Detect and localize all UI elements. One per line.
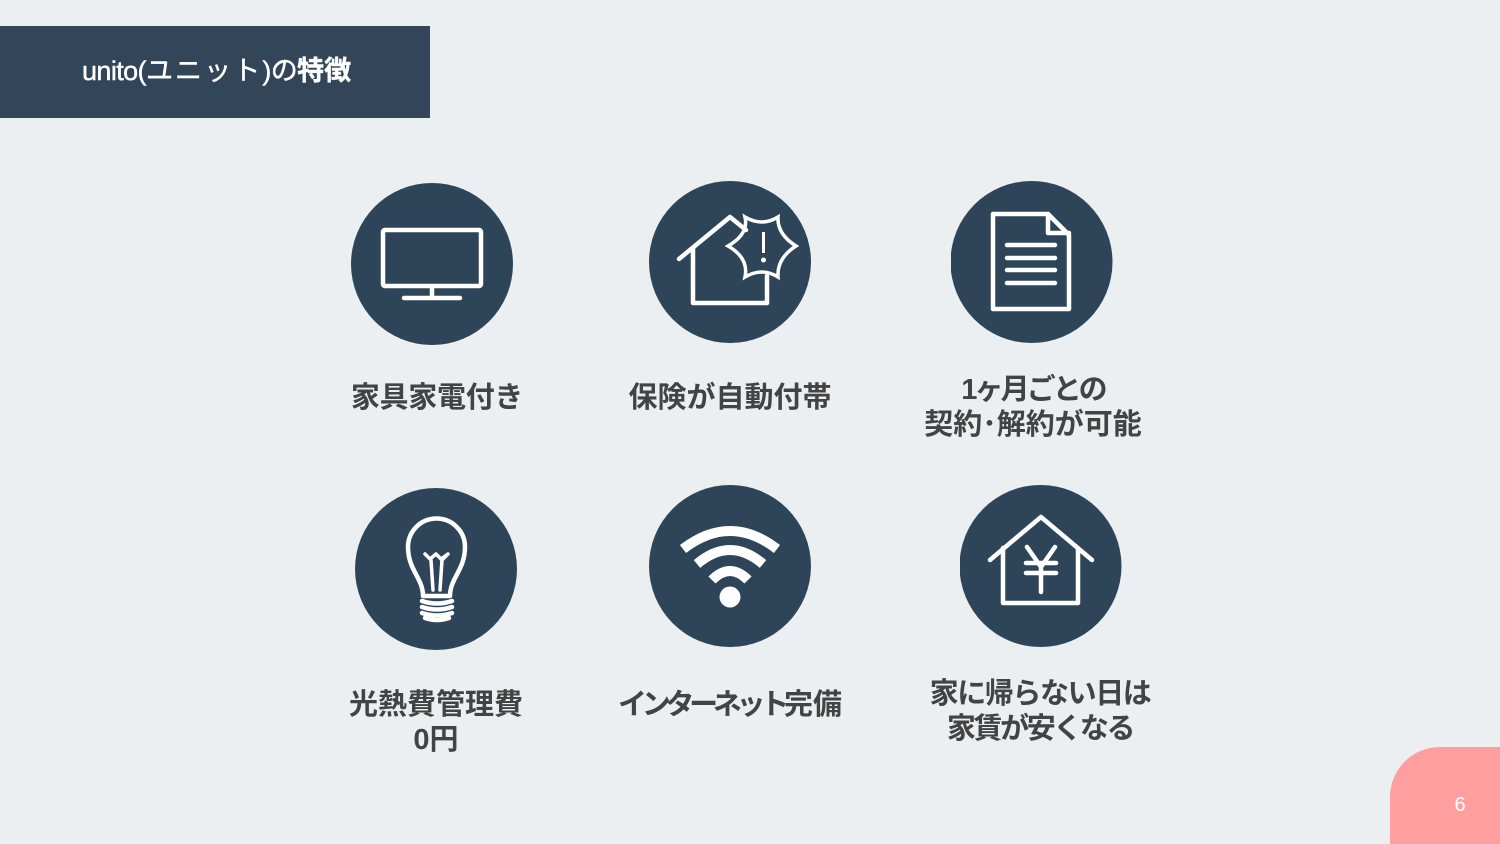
title banner — [0, 26, 430, 118]
page number: 6 — [1454, 794, 1466, 816]
label: rent reduction — [930, 678, 1151, 745]
label: utilities and management fee — [349, 688, 523, 756]
page number tab — [1390, 747, 1500, 844]
icon: television — [351, 183, 513, 345]
feature: internet — [618, 485, 842, 721]
title text: unito(ユニット)の特徴 — [82, 56, 351, 86]
feature: insurance — [628, 181, 832, 414]
feature: monthly contract — [924, 181, 1142, 441]
label: monthly contract: 1ヶ月ごとの — [961, 374, 1105, 406]
icon: house with yen — [960, 485, 1122, 647]
feature: utilities and management fee — [349, 488, 523, 756]
label: monthly contract: 契約･解約が可能 — [924, 409, 1142, 441]
feature: furniture and appliances — [351, 183, 523, 414]
label: internet: インターネット完備 — [618, 689, 842, 721]
label: furniture and appliances: 家具家電付き — [351, 382, 523, 414]
icon: light bulb — [355, 488, 517, 650]
icon: wifi — [649, 485, 811, 647]
feature: rent reduction — [930, 485, 1151, 745]
label: utilities and management fee: 光熱費管理費 — [349, 689, 523, 721]
icon: document — [951, 181, 1112, 343]
label: rent reduction: 家賃が安くなる — [947, 713, 1133, 745]
icon: house with alert — [649, 181, 811, 343]
label: utilities and management fee: 0円 — [413, 724, 459, 756]
label: insurance: 保険が自動付帯 — [628, 382, 832, 414]
label: rent reduction: 家に帰らない日は — [930, 678, 1150, 710]
label: monthly contract — [924, 374, 1142, 441]
